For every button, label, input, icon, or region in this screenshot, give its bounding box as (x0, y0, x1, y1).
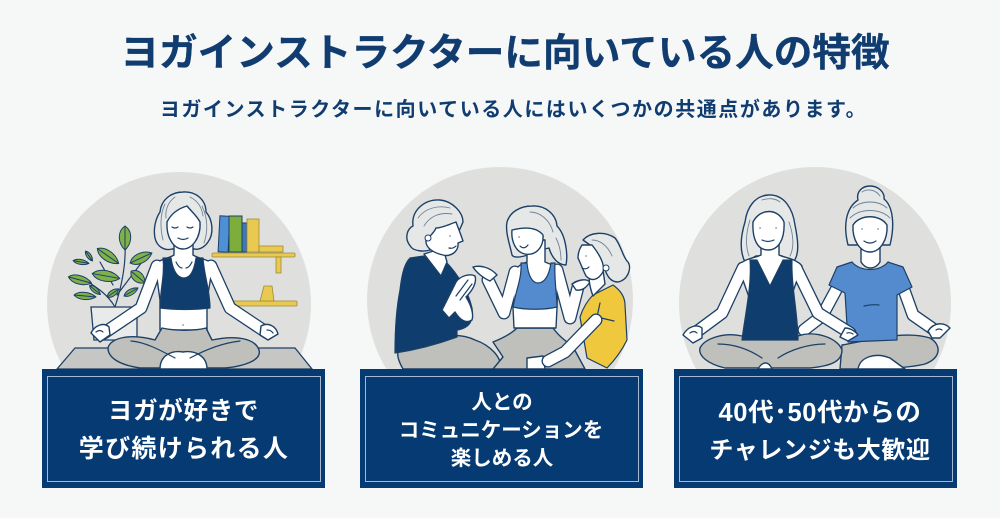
yoga mat (57, 348, 312, 369)
card: communication: コミュニケーションを (399, 419, 603, 442)
panel: communication (367, 167, 633, 433)
card: yoga lover: 学び続けられる人 (79, 435, 289, 463)
figure: young woman in blue top (473, 206, 590, 369)
figure: woman in navy tank (683, 195, 858, 369)
subtitle: ヨガインストラクターに向いている人にはいくつかの共通点があります。 (160, 97, 867, 121)
card: communication: 楽しめる人 (451, 447, 554, 470)
card: 40s and 50s welcome (674, 369, 957, 488)
icon: bookshelf (212, 216, 297, 306)
background circle 3 (679, 167, 951, 439)
card: communication (360, 369, 643, 488)
background circle 2 (367, 167, 633, 433)
figure: meditating woman (91, 192, 278, 369)
card: 40s and 50s welcome: 40代･50代からの (719, 399, 921, 427)
figure: woman in yellow (548, 233, 630, 368)
title: ヨガインストラクターに向いている人の特徴 (120, 32, 890, 75)
card: communication: 人との (471, 391, 533, 414)
panel: yoga lover (47, 172, 312, 436)
icon: potted plant (67, 226, 154, 340)
figure: older woman in blue shirt (804, 186, 950, 369)
background circle 1 (47, 172, 311, 436)
figure: older woman in navy (395, 200, 500, 369)
panel: 40s and 50s (679, 167, 951, 439)
card: 40s and 50s welcome: チャレンジも大歓迎 (709, 437, 931, 464)
card: yoga lover (42, 369, 325, 488)
card: yoga lover: ヨガが好きで (108, 396, 259, 425)
